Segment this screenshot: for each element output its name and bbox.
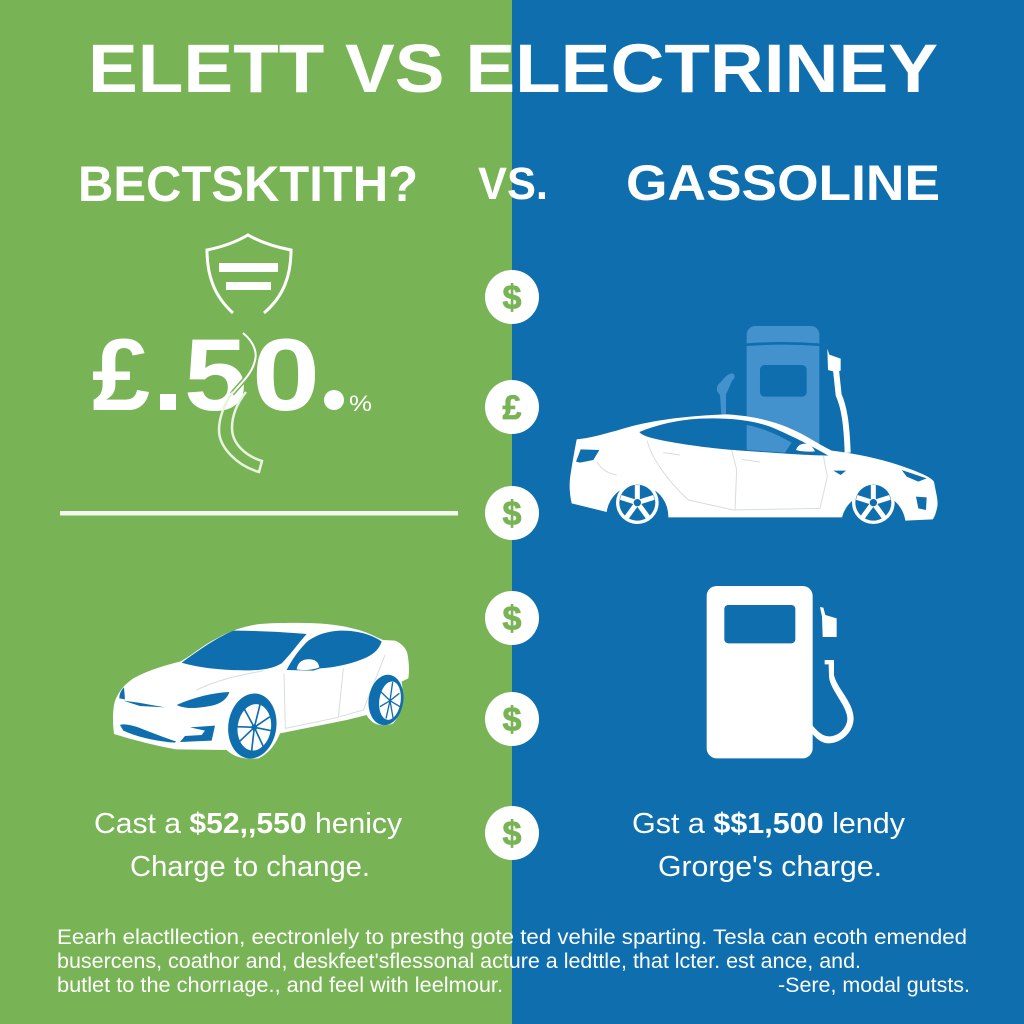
- car side windows: [287, 631, 382, 671]
- icon: shield: [207, 235, 291, 313]
- coin: dollar 5: [485, 806, 539, 860]
- car details: [597, 441, 827, 510]
- coin: dollar 5: $: [503, 815, 522, 853]
- car body: [113, 623, 409, 759]
- heading: versus: VS.: [478, 158, 548, 209]
- coin: dollar 3: $: [503, 600, 522, 638]
- text block: right price: Grorge's charge.: [658, 851, 882, 883]
- coin: dollar 1: $: [503, 279, 522, 317]
- icon: charging cable: [219, 333, 262, 472]
- heading: right column: GASSOLINE: [626, 155, 940, 211]
- icon: fuel pump: [707, 586, 854, 758]
- text block: footer paragraph: butlet to the chorrıage., and feel with leelmour.: [57, 974, 503, 997]
- big price figure: %: [349, 391, 372, 416]
- text block: left price: Cast a $52,,550 henicy: [94, 808, 403, 840]
- illustration: three-quarter view car: [113, 623, 409, 762]
- divider line: [60, 511, 458, 516]
- coin: dollar 4: $: [503, 701, 522, 739]
- coin: dollar 2: $: [503, 495, 522, 533]
- car body: [570, 414, 938, 521]
- headlight: [177, 692, 229, 708]
- coin: dollar 4: [485, 692, 539, 746]
- title: ELETT VS ELECTRINEY: [88, 30, 938, 107]
- coin: pound: [485, 380, 539, 434]
- heading: left column: BECTSKTITH?: [78, 156, 418, 212]
- front wheel: [852, 481, 895, 524]
- text block: footer paragraph: busercens, coathor and, deskfeet'sflessonal acture a ledttle, that lcter. est ance, and.: [57, 950, 861, 973]
- panel: blue right background: [512, 0, 1024, 1024]
- text block: right price: Gst a $$1,500 lendy: [632, 808, 906, 840]
- big price figure: [92, 318, 372, 432]
- car details: [197, 655, 385, 728]
- illustration: charging station and side-view car: [570, 326, 938, 524]
- icon: charging station: [717, 326, 848, 456]
- text block: left price: Charge to change.: [130, 851, 370, 883]
- panel: green left background: [0, 0, 512, 1024]
- rear wheel: [616, 481, 659, 524]
- car windshield: [182, 631, 307, 670]
- text block: footer paragraph: [57, 926, 967, 997]
- big price figure: £: [92, 318, 150, 432]
- credit line: -Sere, modal gutsts.: [778, 974, 970, 997]
- car windows: [639, 418, 828, 456]
- text block: left price: [94, 808, 403, 883]
- big price figure: 5: [184, 318, 247, 432]
- coin: pound: £: [503, 389, 522, 427]
- rear wheel: [365, 673, 407, 727]
- car mirror: [297, 659, 319, 670]
- coin: dollar 2: [485, 486, 539, 540]
- coin: dollar 1: [485, 270, 539, 324]
- text block: right price: [632, 808, 906, 883]
- coin: dollar 3: [485, 591, 539, 645]
- text block: footer paragraph: Eearh elactllection, eectronlely to presthg gote ted vehile sparting. Tesla can ecoth emended: [57, 926, 967, 949]
- lower grille: [120, 724, 176, 743]
- front wheel: [224, 690, 281, 762]
- coin column: [485, 270, 539, 860]
- big price figure: 0: [252, 318, 320, 432]
